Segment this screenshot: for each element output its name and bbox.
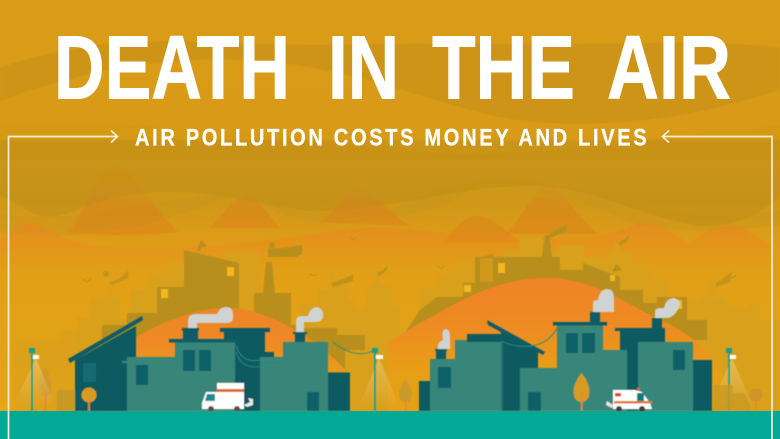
orange hills [128, 278, 740, 411]
power wires left [236, 342, 375, 367]
dark centre building [220, 328, 274, 411]
green building left [122, 328, 238, 411]
round tree far right [750, 388, 762, 411]
white frame with arrows [8, 130, 772, 439]
dark building C [615, 318, 665, 411]
title: THE [432, 18, 575, 118]
smoke plume right [296, 307, 323, 332]
far left tree [39, 367, 51, 411]
right street lamp [710, 348, 754, 411]
right-of-left street lamp [358, 348, 400, 411]
moving truck [202, 383, 253, 412]
dark house [68, 316, 143, 411]
subtitle: AIR POLLUTION COSTS MONEY AND LIVES [135, 124, 647, 151]
green building A [430, 340, 501, 411]
background block [57, 390, 75, 411]
pale cut-out inside right skyline [480, 258, 493, 282]
green building C [638, 342, 712, 411]
left street lamp [12, 348, 56, 411]
lit windows in skyline [161, 263, 682, 309]
power wire right [501, 328, 557, 346]
tree in front of building B [574, 373, 589, 411]
faint birds [83, 237, 736, 282]
smoke plume C [655, 298, 680, 318]
tree far, right side [399, 379, 412, 411]
smoke plume A [438, 329, 450, 349]
dark mid skyline right [400, 224, 732, 400]
green building right [260, 332, 350, 411]
dark block far left [419, 381, 430, 411]
title: IN [328, 18, 399, 118]
round yellow tree [82, 388, 96, 411]
title: AIR [607, 18, 731, 118]
orange haze peaks [0, 166, 775, 275]
teal ground [0, 411, 780, 439]
title: DEATH [54, 18, 290, 118]
scene: left street [12, 289, 762, 412]
ambulance [606, 388, 652, 412]
smoke plume B [593, 289, 614, 312]
green building B [520, 312, 627, 411]
dark mid skyline left [102, 240, 388, 411]
pale far skyline [14, 238, 780, 411]
smoke plume left [188, 307, 233, 328]
smog waves [0, 41, 780, 236]
dark building with slanted roof [467, 320, 545, 411]
title [54, 18, 731, 118]
faded vehicle by lamp [713, 385, 750, 411]
